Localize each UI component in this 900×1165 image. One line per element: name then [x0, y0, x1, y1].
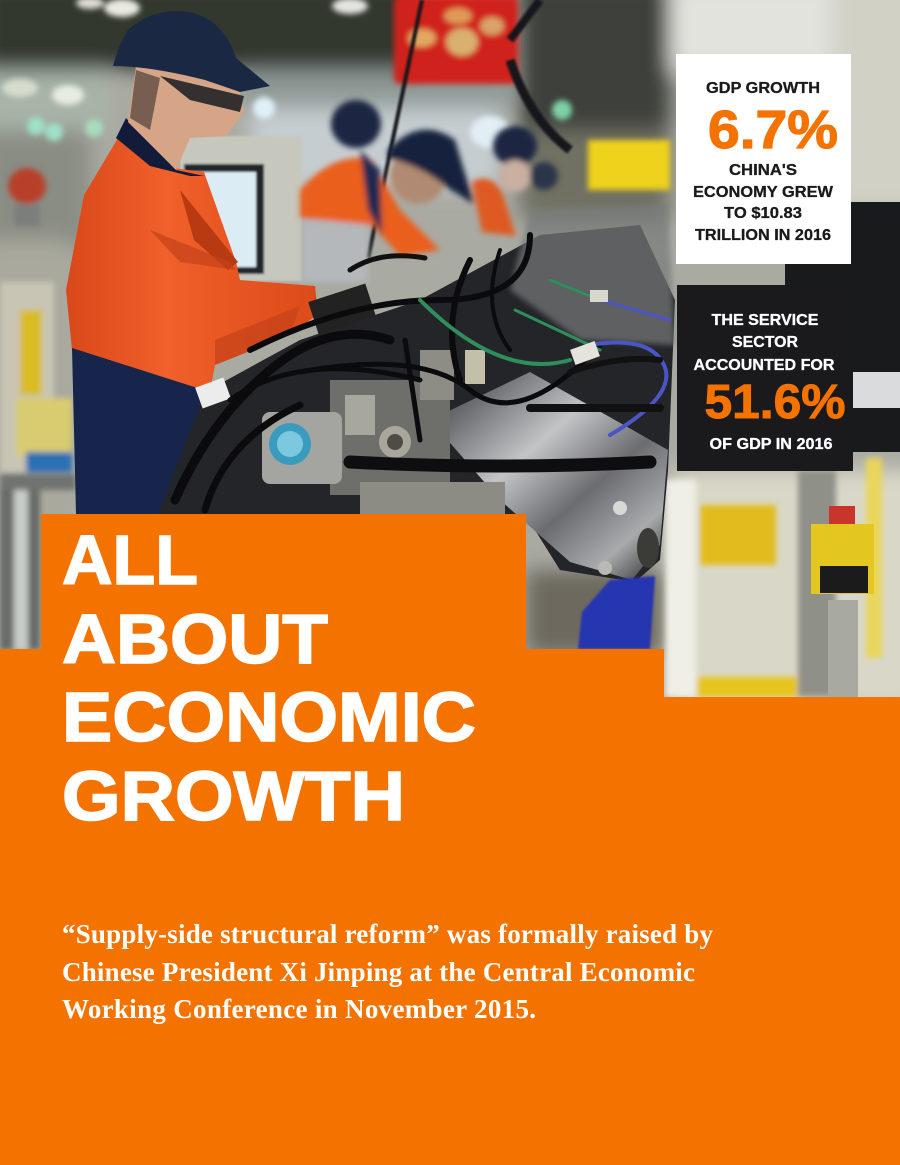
title: ABOUT: [62, 600, 328, 678]
callout: service sector: THE SERVICE: [712, 312, 818, 329]
callout: service sector: SECTOR: [732, 334, 798, 351]
photo: red signal board: [394, 0, 518, 84]
callout: service sector: 51.6%: [704, 376, 846, 429]
callout: GDP growth: TRILLION IN 2016: [695, 227, 831, 244]
photo: blurred red figure far left: [8, 168, 46, 226]
photo: black cables top: [368, 0, 570, 258]
callout: GDP growth: GDP GROWTH: [706, 80, 820, 97]
body text: “Supply-side structural reform” was formally raised by: [62, 919, 714, 949]
title: GROWTH: [62, 757, 405, 835]
photo: blue parts bins: [578, 576, 655, 649]
photo: bokeh lights: [2, 0, 572, 148]
callout: GDP growth: CHINA'S: [729, 162, 797, 179]
callout: service sector: [677, 285, 853, 471]
title: ALL: [62, 521, 198, 599]
body text: [62, 919, 714, 1024]
photo: factory worker at engine assembly line: [0, 0, 900, 710]
title: ECONOMIC: [62, 678, 476, 756]
photo background: blurred factory hall: [0, 0, 900, 710]
photo: engine block and wiring: [158, 205, 675, 582]
photo: navy trousers: [72, 348, 210, 514]
callout: GDP growth: ECONOMY GREW: [693, 184, 833, 201]
callout: service sector: OF GDP IN 2016: [710, 436, 833, 453]
callout: GDP growth: 6.7%: [708, 100, 838, 160]
callout: service sector: ACCOUNTED FOR: [694, 357, 834, 374]
title: [62, 521, 476, 835]
callout: GDP growth: TO $10.83: [724, 205, 802, 222]
photo: monitor: [180, 136, 302, 281]
orange stepped background panel: [0, 514, 900, 1165]
photo: orange jacket: [66, 138, 318, 392]
photo: blurred background workers: [300, 100, 558, 282]
photo: yellow blurred machines: [0, 140, 882, 697]
callout: GDP growth: [676, 54, 851, 264]
photo: foreground worker: [66, 11, 318, 514]
body text: Chinese President Xi Jinping at the Central Economic: [62, 957, 695, 987]
photo: navy collar: [116, 118, 204, 176]
body text: Working Conference in November 2015.: [62, 994, 536, 1024]
photo: emergency stop box: [811, 506, 874, 697]
photo: navy cap: [113, 11, 270, 92]
photo: face: [128, 66, 244, 170]
photo: dark panel behind callouts: [785, 202, 900, 452]
